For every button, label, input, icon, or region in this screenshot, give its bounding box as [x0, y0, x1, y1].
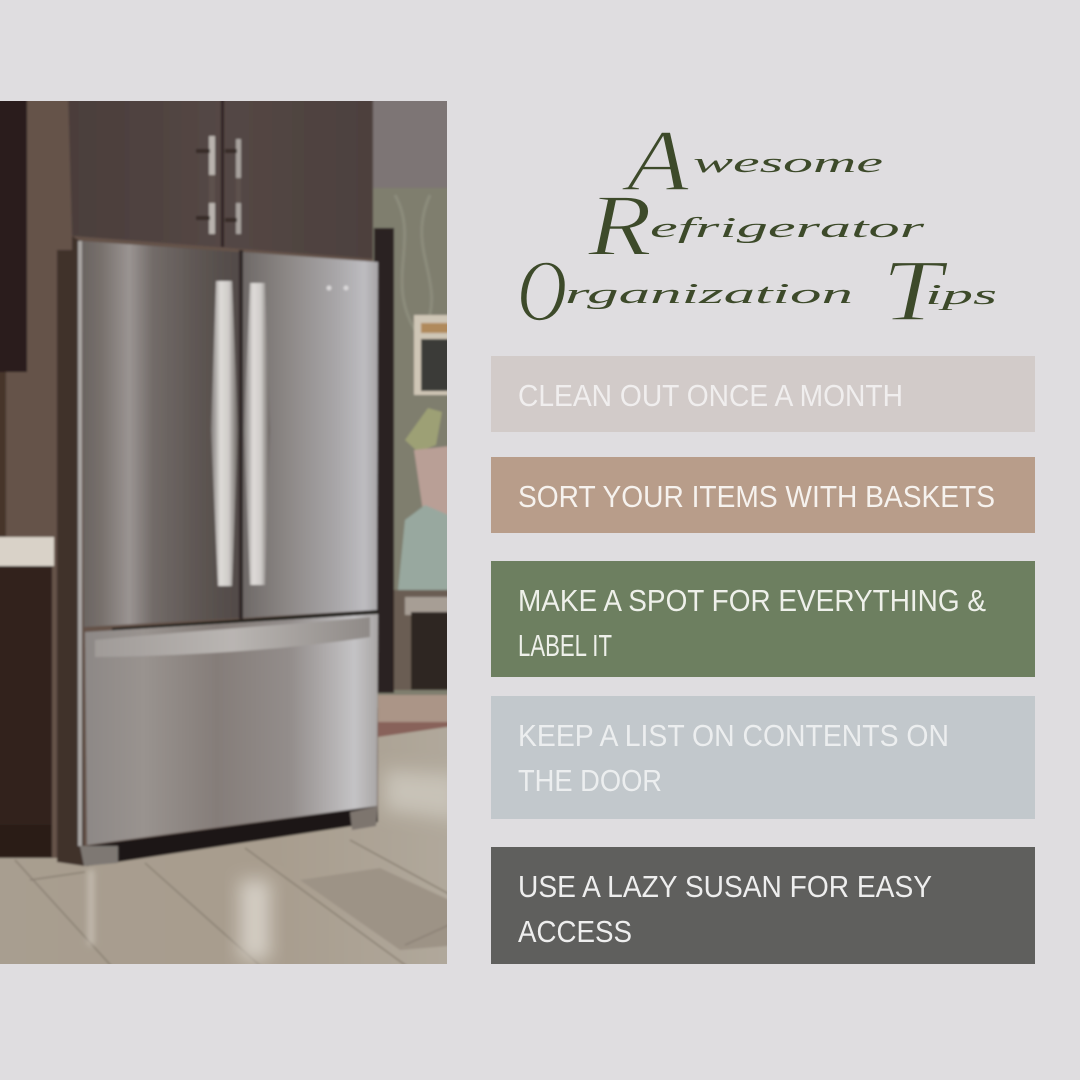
- title line: Organization Tips: T: [882, 243, 949, 340]
- tip 5 text: USE A LAZY SUSAN FOR EASY: [518, 870, 932, 904]
- title line: Organization Tips: ips: [925, 280, 997, 311]
- tip 3 text: MAKE A SPOT FOR EVERYTHING &: [518, 584, 986, 618]
- right room wall and wallpaper: [372, 101, 447, 696]
- tip 1 panel: [491, 356, 1035, 432]
- upper wood cabinet with handles: [68, 90, 373, 259]
- title line: Refrigerator: efrigerator: [650, 213, 924, 244]
- fridge feet: [80, 806, 378, 866]
- rug: [377, 694, 447, 737]
- tip 3 text: [518, 584, 986, 663]
- fridge right door: [243, 252, 378, 618]
- title line: Organization Tips: rganization: [565, 279, 853, 310]
- tip 2 text: SORT YOUR ITEMS WITH BASKETS: [518, 480, 995, 514]
- right door handle: [244, 283, 270, 585]
- tip 4 text: KEEP A LIST ON CONTENTS ON: [518, 719, 949, 753]
- title line: Awesome: wesome: [693, 148, 883, 179]
- tip 5 text: [518, 870, 932, 949]
- tip 5 panel: [491, 847, 1035, 964]
- left tile backsplash: [0, 372, 6, 537]
- title: [517, 113, 997, 340]
- floor tiles: [0, 725, 460, 975]
- fridge shadow under drawer: [86, 806, 378, 866]
- tip 2 panel: [491, 457, 1035, 533]
- plant and hanging towel: [397, 408, 447, 592]
- counter and lower cabinet: [0, 537, 54, 861]
- center gap between doors: [239, 250, 243, 619]
- tip 5 text: ACCESS: [518, 915, 632, 949]
- left dark cabinet: [0, 90, 27, 372]
- door edge highlight: [78, 241, 82, 846]
- shelf and bench: [392, 589, 447, 691]
- fridge left door: [82, 241, 240, 627]
- tip 3 panel: [491, 561, 1035, 677]
- fridge side panel: [57, 236, 84, 866]
- tip 4 panel: [491, 696, 1035, 819]
- tip 1 text: CLEAN OUT ONCE A MONTH: [518, 379, 903, 413]
- title line: Awesome: A: [621, 113, 690, 210]
- freezer drawer handle: [95, 617, 370, 657]
- title line: Refrigerator: R: [587, 178, 652, 275]
- left door handle: [211, 281, 238, 586]
- freezer drawer: [85, 614, 378, 845]
- picture frame: [412, 314, 447, 396]
- freezer gap: [111, 610, 377, 631]
- kitchen wall: [4, 101, 380, 860]
- title line: Organization Tips: O: [517, 243, 567, 340]
- photo: stainless steel french door refrigerator in a kitchen: [0, 90, 465, 975]
- tip 4 text: THE DOOR: [518, 764, 662, 798]
- tip 3 text: LABEL IT: [518, 629, 612, 663]
- tip 4 text: [518, 719, 949, 798]
- control lights: [326, 286, 348, 290]
- doorway frame: [374, 228, 394, 693]
